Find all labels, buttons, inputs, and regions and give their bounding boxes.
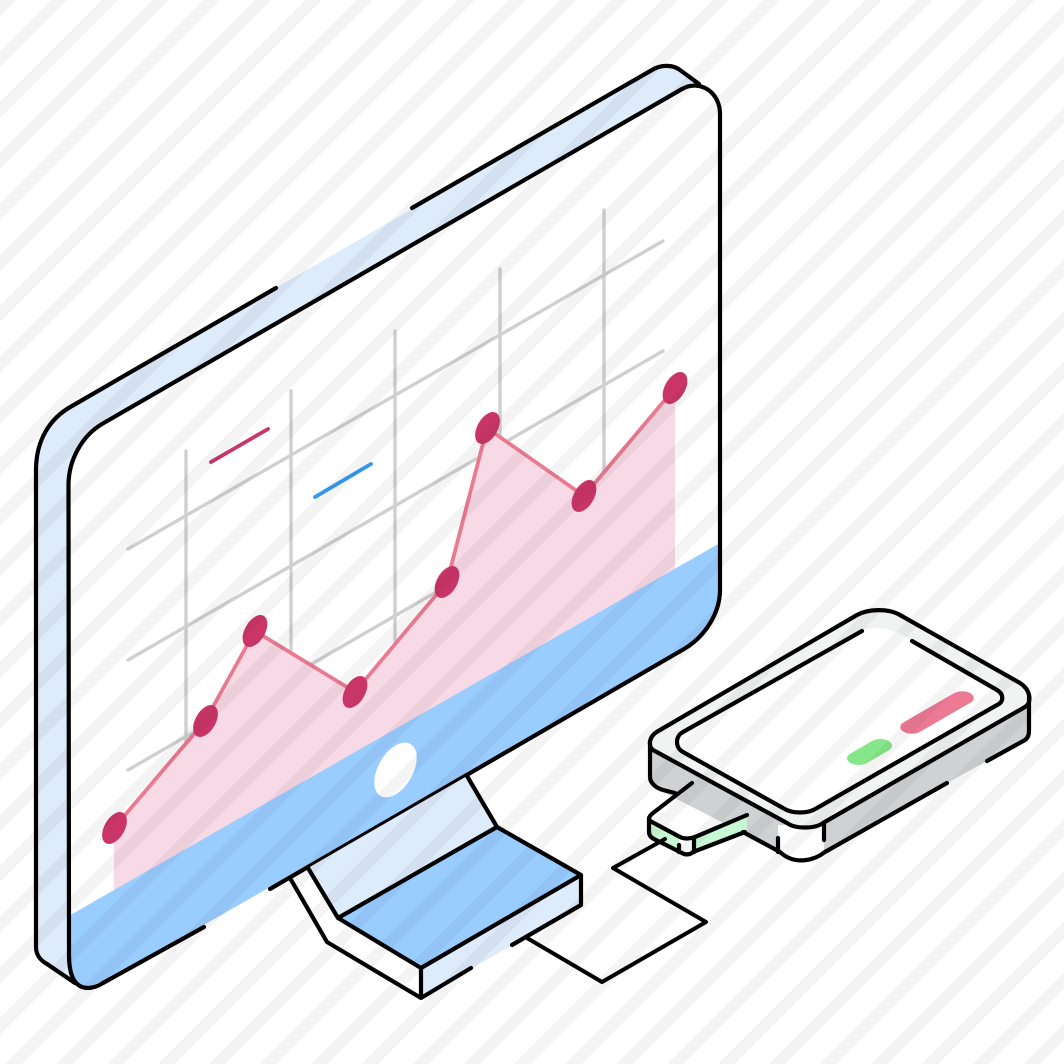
tablet rim [650, 610, 1029, 828]
stand neck [308, 776, 497, 918]
tablet side [650, 697, 1029, 852]
monitor chin [60, 543, 730, 1000]
area chart fill [114, 388, 675, 892]
red pill [895, 688, 979, 736]
tablet device [649, 610, 1029, 860]
tablet outlines [649, 610, 1029, 860]
power button [374, 733, 417, 807]
chart grid [128, 210, 663, 770]
chart line [114, 388, 675, 828]
stand outlines [290, 776, 581, 998]
monitor outlines [36, 66, 720, 988]
legend: blue key [315, 464, 371, 497]
chart data points [102, 367, 687, 849]
tablet screen [677, 628, 1002, 812]
legend: pink key [211, 429, 268, 462]
tablet corner highlight [778, 825, 824, 859]
cable [527, 839, 706, 982]
connector mint faces [651, 816, 747, 852]
base top [338, 827, 581, 968]
base side [421, 875, 581, 998]
monitor bezel side [36, 66, 720, 990]
monitor stand [290, 776, 581, 998]
connector [649, 783, 747, 854]
screen background [68, 86, 720, 988]
green pill [842, 736, 897, 768]
